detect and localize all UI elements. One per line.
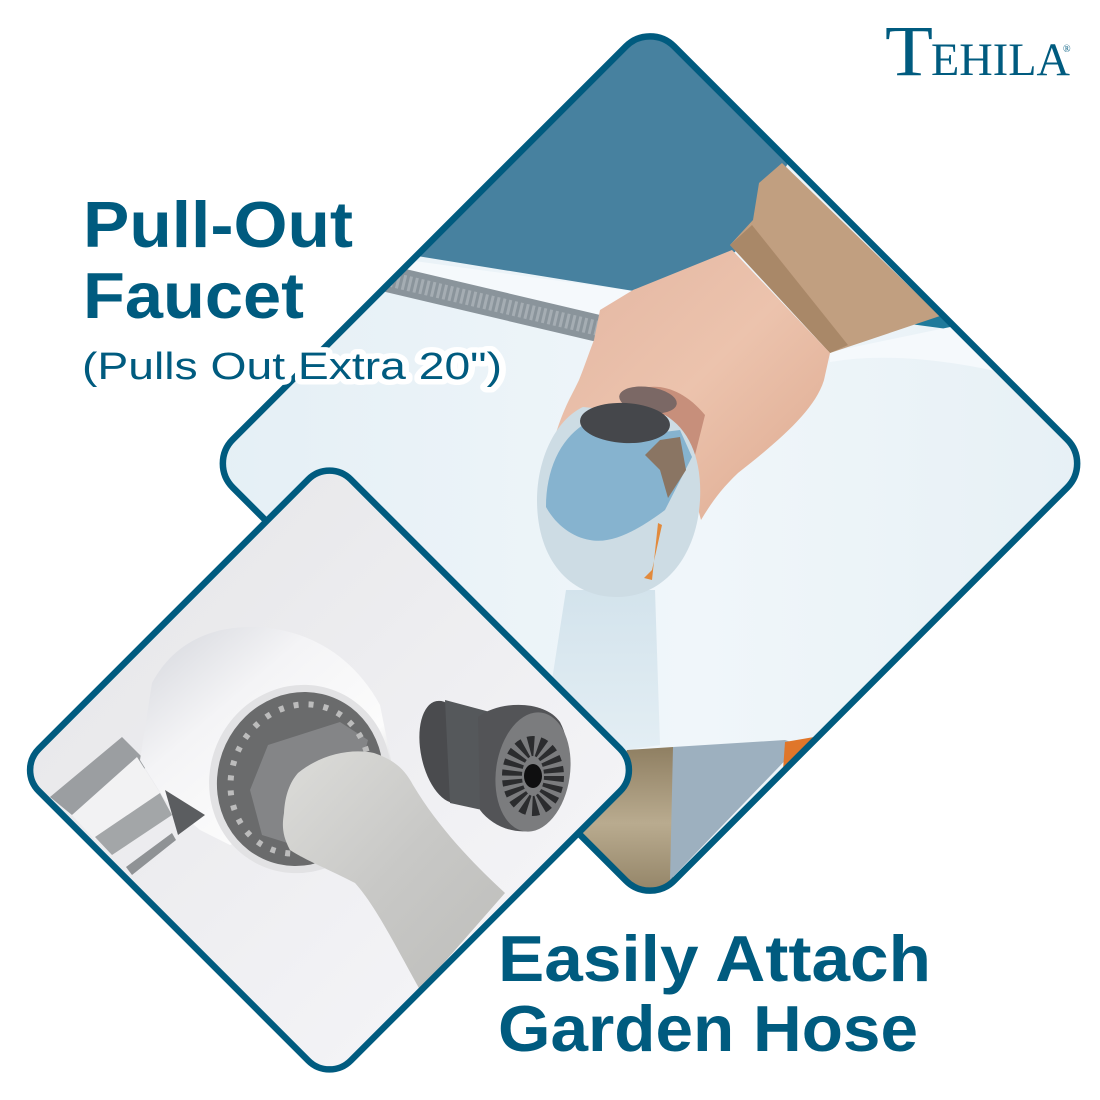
sweater sleeve [730, 163, 940, 353]
finger shadow [650, 386, 705, 454]
heading: pull-out faucet: Faucet [83, 259, 304, 332]
rear button [619, 386, 677, 413]
hex nut [250, 722, 368, 850]
heading: pull-out faucet [83, 188, 353, 332]
ring holes [228, 701, 370, 856]
braided hose [385, 278, 605, 330]
tub rim [408, 262, 632, 306]
panel: pull-out faucet photo [220, 33, 1080, 894]
logo: Tehila [885, 11, 1071, 91]
heading: easily attach garden hose: Easily Attach [498, 922, 931, 995]
chrome faucet head [537, 401, 700, 597]
chrome faucet body [140, 627, 395, 845]
logo: Tehila: ® [1063, 44, 1071, 55]
aerator [419, 700, 571, 832]
heading: pull-out faucet: Pull-Out [83, 188, 353, 261]
panel: garden hose attachment photo [18, 458, 641, 1082]
heading: easily attach garden hose: Garden Hose [498, 992, 918, 1065]
hand [556, 250, 830, 520]
teal strip behind sleeve [914, 316, 950, 328]
paint brush [580, 737, 814, 900]
subheading: pulls out extra 20 inches: (Pulls Out Extra 20") [82, 346, 502, 388]
water spray [552, 590, 660, 750]
tub rim right [830, 327, 994, 370]
heading: easily attach garden hose [498, 922, 931, 1065]
garden hose [283, 751, 505, 990]
logo: Tehila: T [885, 11, 933, 91]
chrome arm [50, 737, 176, 875]
outlet ring [209, 685, 388, 873]
logo: Tehila: EHILA [931, 34, 1070, 86]
blue wall [420, 40, 788, 291]
